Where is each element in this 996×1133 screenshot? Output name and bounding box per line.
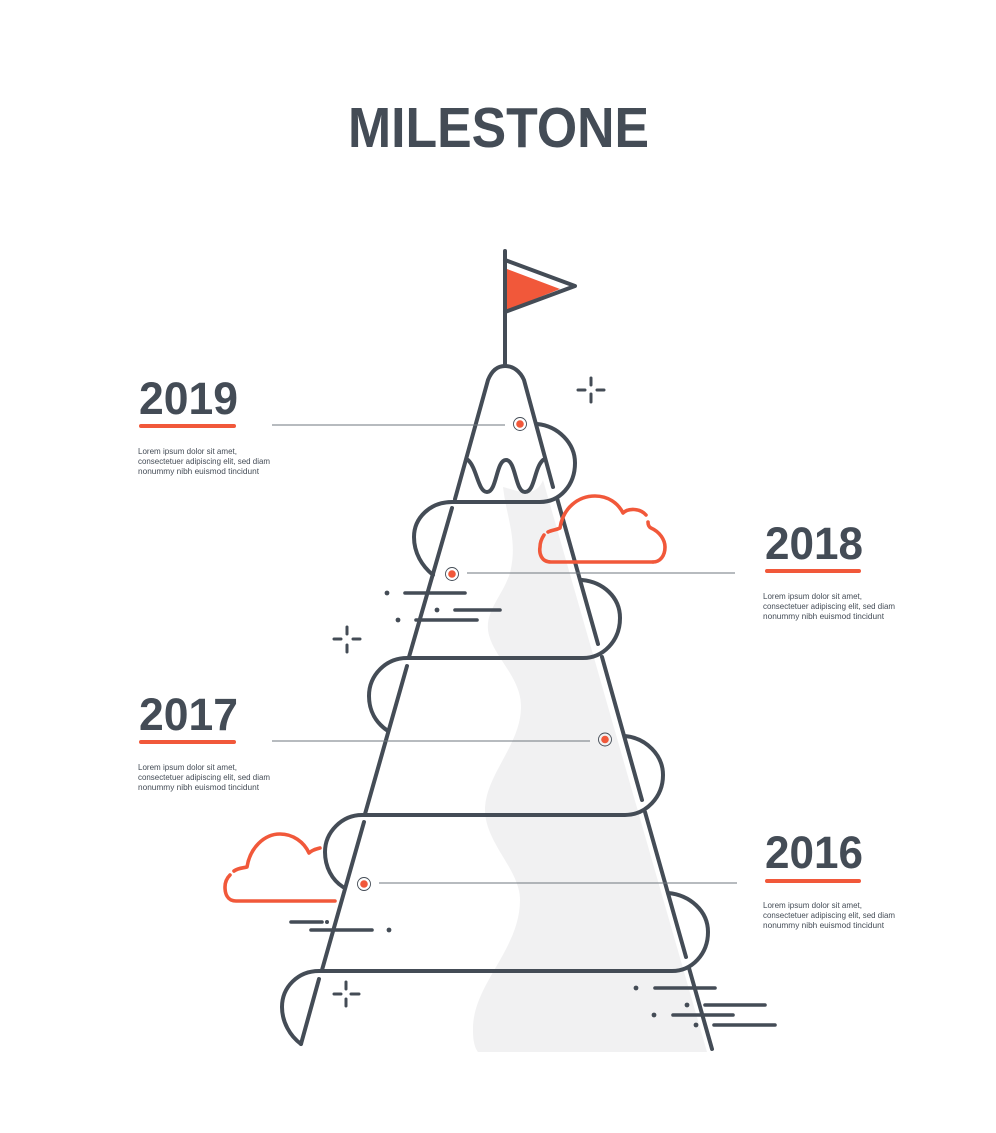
description 2019: Lorem ipsum dolor sit amet, xyxy=(138,446,237,456)
year 2017: 2017 xyxy=(139,689,238,740)
accent bar 2016 xyxy=(767,879,859,883)
milestone 2017 xyxy=(138,689,612,792)
description 2017: Lorem ipsum dolor sit amet, xyxy=(138,762,237,772)
right slope 2 xyxy=(557,498,598,644)
ridge band 4 xyxy=(282,893,708,1044)
year 2019: 2019 xyxy=(139,373,238,424)
speed lines upper xyxy=(385,591,500,622)
sparkle middle xyxy=(334,627,360,652)
leader line 2016 xyxy=(379,882,737,884)
marker 2018 xyxy=(446,568,458,580)
milestone 2016 xyxy=(358,827,895,930)
marker 2019 xyxy=(514,418,526,430)
flag fill xyxy=(507,269,560,310)
marker 2016 xyxy=(358,878,370,890)
description 2016: consectetuer adipiscing elit, sed diam xyxy=(763,910,895,920)
description 2018: nonummy nibh euismod tincidunt xyxy=(763,611,885,621)
marker 2017 xyxy=(598,733,612,746)
milestone 2019 xyxy=(138,373,526,476)
ridge band 2 xyxy=(369,580,620,731)
snow line xyxy=(468,460,543,492)
description 2019: consectetuer adipiscing elit, sed diam xyxy=(138,456,270,466)
cloud left xyxy=(225,834,335,901)
leader line 2019 xyxy=(272,424,505,426)
description 2016: nonummy nibh euismod tincidunt xyxy=(763,920,885,930)
sparkle top xyxy=(578,378,604,402)
right slope 4 xyxy=(645,812,686,957)
mountain peak xyxy=(455,366,553,499)
leader line 2017 xyxy=(272,740,590,742)
cloud right xyxy=(540,496,665,562)
accent bar 2017 xyxy=(141,740,234,744)
description 2017: consectetuer adipiscing elit, sed diam xyxy=(138,772,270,782)
speed lines left xyxy=(291,920,391,932)
left slope 2 xyxy=(409,508,452,657)
description 2019: nonummy nibh euismod tincidunt xyxy=(138,466,260,476)
year 2018: 2018 xyxy=(765,518,863,569)
milestone 2018 xyxy=(446,518,895,621)
ridge band 3 xyxy=(325,736,663,887)
speed lines bottom right xyxy=(634,986,775,1027)
leader line 2018 xyxy=(467,572,735,574)
mountain illustration xyxy=(282,251,712,1049)
right slope 5 xyxy=(689,968,712,1049)
flag outline xyxy=(505,260,575,312)
sparkle bottom xyxy=(334,982,359,1006)
left slope 5 xyxy=(301,979,319,1044)
description 2018: consectetuer adipiscing elit, sed diam xyxy=(763,601,895,611)
ridge band 1 xyxy=(414,424,575,575)
description 2018: Lorem ipsum dolor sit amet, xyxy=(763,591,862,601)
accent bar 2018 xyxy=(767,569,859,573)
mountain shadow xyxy=(473,480,707,1052)
flag pole xyxy=(503,251,507,366)
description 2017: nonummy nibh euismod tincidunt xyxy=(138,782,260,792)
title: MILESTONE xyxy=(348,96,649,160)
left slope 4 xyxy=(322,822,364,970)
description 2016: Lorem ipsum dolor sit amet, xyxy=(763,900,862,910)
year 2016: 2016 xyxy=(765,827,863,878)
accent bar 2019 xyxy=(141,424,234,428)
right slope 3 xyxy=(602,657,642,800)
left slope 3 xyxy=(365,666,407,814)
